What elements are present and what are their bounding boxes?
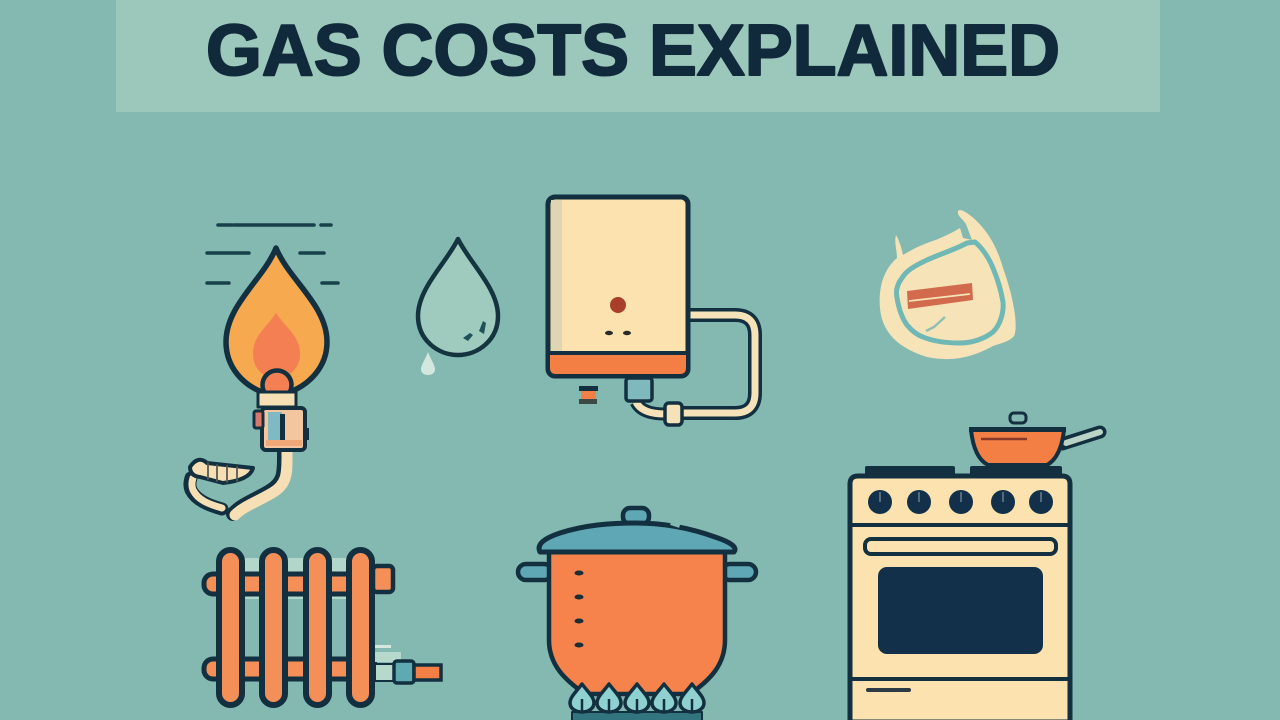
icon: water heater [548, 197, 755, 425]
small fitting [579, 386, 598, 404]
burner base [572, 712, 702, 720]
burner cap [262, 370, 292, 400]
valve body [262, 408, 305, 450]
pan handle [1062, 432, 1100, 444]
oven handle [865, 539, 1056, 554]
icon: gas bill document [880, 210, 1016, 359]
pot level marks [574, 570, 584, 648]
title: GAS COSTS EXPLAINED [206, 11, 1060, 91]
icon: gas burner flame [190, 225, 338, 515]
pot lid knob [623, 508, 649, 524]
check mark [926, 317, 945, 331]
drawer handle [866, 688, 911, 692]
pot body [549, 552, 725, 694]
small droplet [421, 352, 435, 375]
gas flames [570, 684, 704, 712]
radiator top strip [240, 558, 355, 572]
flame [226, 248, 327, 392]
heater pipe [636, 315, 755, 414]
icon: radiator [204, 550, 441, 705]
pan lid knob [1010, 413, 1026, 423]
inner flame [253, 313, 300, 376]
icon: water drop [418, 239, 498, 375]
stove knobs [868, 490, 1053, 514]
stove burners [865, 466, 955, 476]
icon: stove and oven [850, 413, 1100, 720]
valve box [626, 378, 652, 401]
radiator valve [375, 645, 441, 683]
pot lid [539, 523, 735, 552]
pot handles [518, 564, 552, 580]
radiator bars [204, 574, 376, 594]
icon: cooking pot [518, 508, 756, 720]
oven window [878, 567, 1043, 654]
pipe coupling [665, 403, 682, 425]
heater base band [550, 355, 686, 374]
top right tab [373, 566, 393, 592]
hose [190, 452, 287, 515]
stove body [850, 476, 1070, 720]
heater body [548, 197, 688, 376]
title banner [116, 0, 1160, 112]
bill red stamp [907, 283, 973, 309]
bill ring [897, 242, 1003, 343]
heat lines [207, 225, 338, 283]
pan bowl [971, 430, 1064, 465]
burner collar [258, 392, 296, 407]
frying pan [969, 413, 1100, 465]
indicator light [610, 297, 626, 313]
radiator columns [219, 550, 372, 705]
hose coil [190, 460, 253, 483]
